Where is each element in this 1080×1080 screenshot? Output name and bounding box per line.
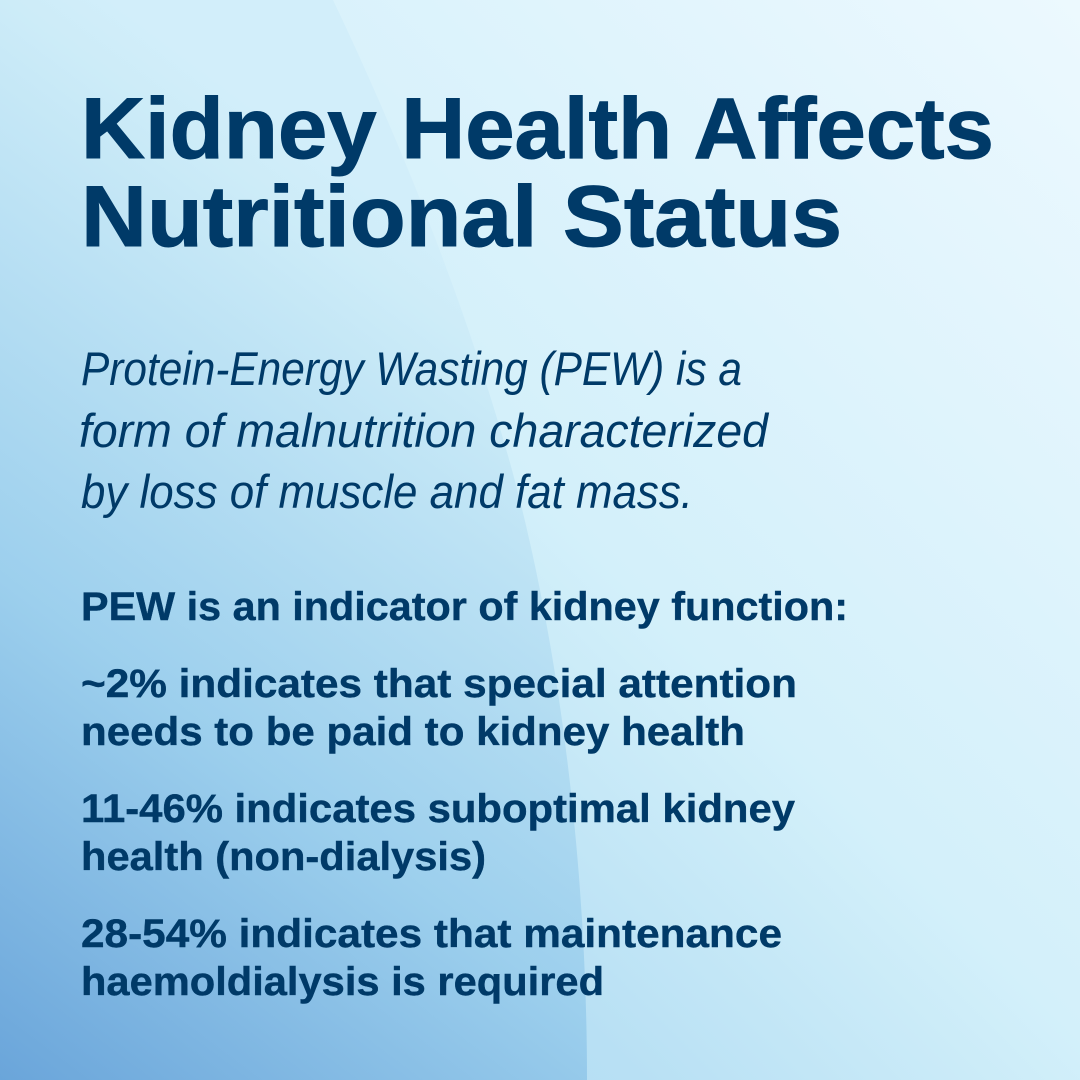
indicator: ~2%: needs to be paid to kidney health	[81, 710, 745, 754]
subheading: PEW is an indicator of kidney function:	[81, 585, 848, 629]
indicator: 11-46%: 11-46% indicates suboptimal kidney	[81, 787, 796, 831]
indicator: 28-54%: haemoldialysis is required	[81, 960, 604, 1004]
indicator: ~2%: ~2% indicates that special attention	[81, 662, 797, 706]
intro text: PEW definition: by loss of muscle and fat mass.	[81, 466, 693, 519]
indicator: ~2%	[81, 662, 797, 754]
title	[81, 81, 994, 265]
intro text: PEW definition	[79, 343, 770, 519]
intro text: PEW definition: Protein-Energy Wasting (PEW) is a	[81, 343, 742, 396]
title: Kidney Health Affects	[81, 81, 994, 177]
indicator: 28-54%: 28-54% indicates that maintenance	[81, 912, 782, 956]
indicator: 11-46%: health (non-dialysis)	[81, 835, 486, 879]
indicator: 11-46%	[81, 787, 796, 879]
intro text: PEW definition: form of malnutrition characterized	[79, 405, 770, 458]
background curved darker shape	[0, 0, 587, 1080]
indicator: 28-54%	[81, 912, 782, 1004]
title: Nutritional Status	[81, 169, 842, 265]
